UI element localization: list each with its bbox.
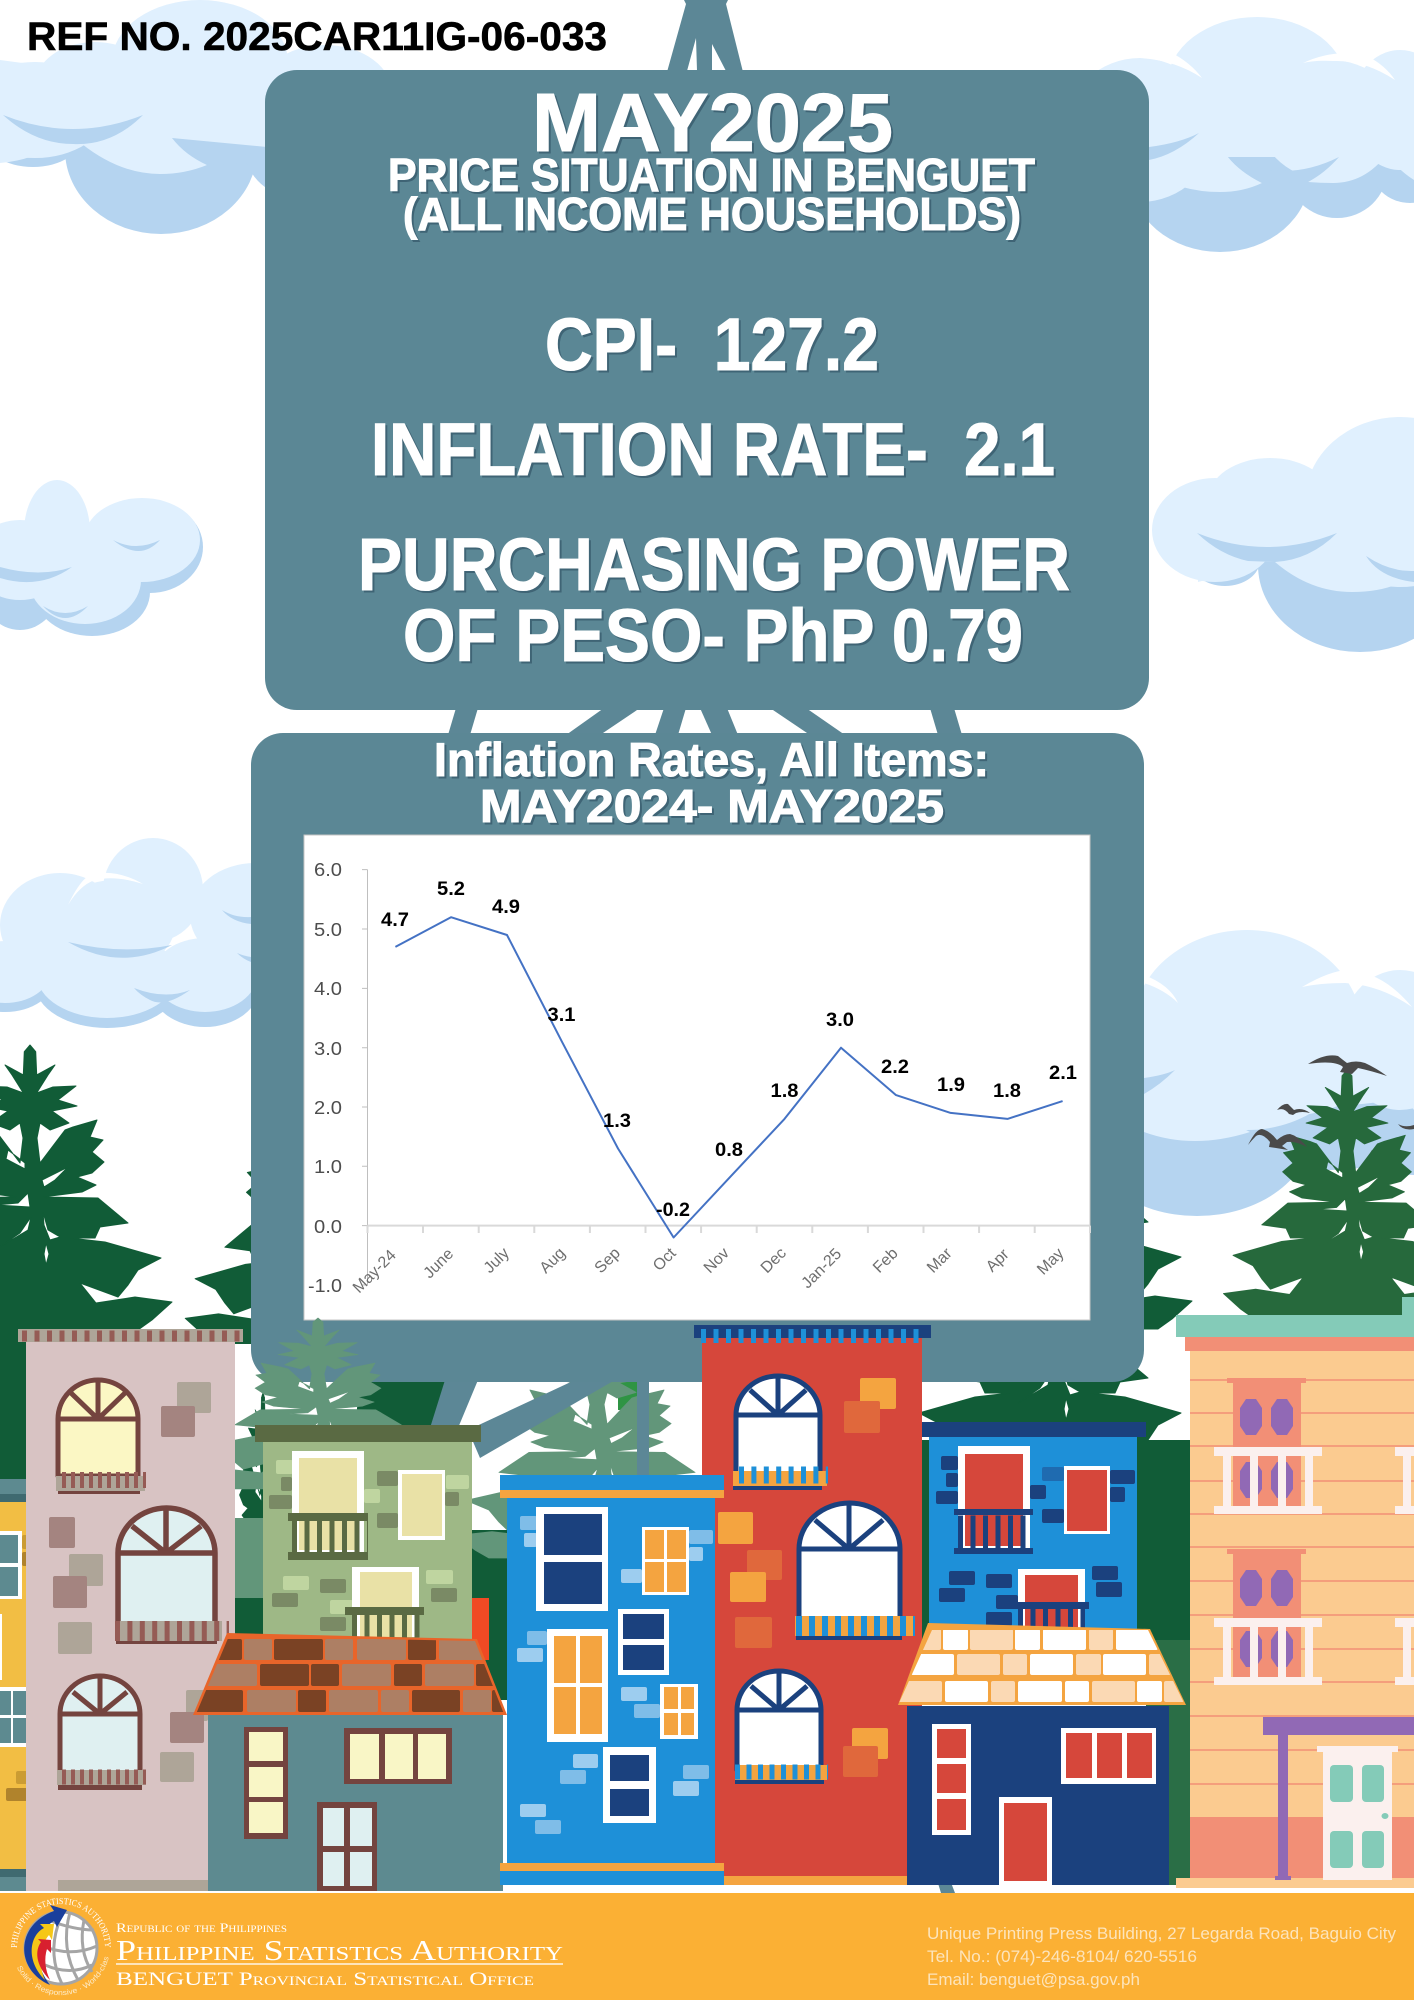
x axis labels: May [1034,1245,1068,1279]
window with balcony [954,1446,1033,1554]
y axis labels: 0.0 [314,1217,342,1237]
roof [898,1623,1186,1705]
y axis labels: 5.0 [314,920,342,940]
porch [1263,1717,1414,1880]
birds behind tree [1353,1114,1383,1165]
window: arched middle [795,1503,915,1640]
window tall [932,1724,971,1835]
data labels: 2.2 [881,1057,909,1078]
window: arched bottom [735,1671,828,1784]
window: arched top [733,1376,828,1490]
x axis labels: Apr [983,1246,1013,1276]
house: red [694,1325,931,1885]
house: navy [898,1623,1186,1885]
house: blue left [500,1475,724,1885]
panel: key figures [265,70,1149,710]
chart heading: MAY2024- MAY2025 [480,780,944,832]
window with balcony [288,1451,368,1560]
house: peach [1176,1297,1414,1888]
contact details: Unique Printing Press Building, 27 Legarda Road, Baguio City [927,1924,1396,1943]
reference number: REF NO. 2025CAR11IG-06-033 [27,15,607,59]
x axis labels: July [481,1245,513,1277]
window orange large [547,1629,608,1742]
line chart [304,835,1090,1320]
data labels: 1.3 [603,1111,631,1132]
balcony window upper [1214,1378,1322,1514]
x axis labels: Sep [592,1245,624,1277]
data labels: 3.0 [826,1010,854,1031]
y axis labels [308,860,342,1296]
y axis labels: 1.0 [314,1157,342,1177]
data labels: -0.2 [656,1200,690,1221]
footer band [0,1893,1414,2000]
panel: chart board [251,733,1144,1382]
x axis labels: Aug [537,1245,569,1277]
PSA logo [11,1898,111,1996]
roof [193,1633,507,1715]
house: red-orange accent [472,1598,489,1660]
x axis labels: Nov [701,1245,733,1277]
cloud: top left [0,0,393,234]
window right [1064,1466,1110,1534]
x axis [368,1226,1090,1233]
office name: Republic of the Philippines [116,1920,287,1935]
contact details: Email: benguet@psa.gov.ph [927,1970,1140,1989]
y axis labels: 4.0 [314,979,342,999]
subtitle line 2: (ALL INCOME HOUSEHOLDS) [403,188,1021,240]
window tall [244,1727,288,1839]
door [317,1802,377,1891]
contact details: Tel. No.: (074)-246-8104/ 620-5516 [927,1947,1197,1966]
window: arched bottom [60,1676,140,1775]
door [1317,1746,1398,1880]
window navy middle [618,1609,669,1675]
y axis labels: 6.0 [314,860,342,880]
house: green [255,1425,481,1642]
purchasing power line 2: OF PESO- PhP 0.79 [403,594,1023,677]
headings and key figures [358,76,1070,677]
x axis labels [350,1245,1068,1297]
window lower [1012,1569,1089,1631]
house: yellow [0,1479,58,1891]
window right [398,1470,445,1540]
data labels [381,879,1077,1221]
cloud: middle left [0,480,203,636]
contact details [927,1924,1396,1989]
x axis labels: Feb [870,1245,902,1277]
y axis labels: 3.0 [314,1039,342,1059]
data labels: 1.8 [770,1081,798,1102]
purchasing power line 1: PURCHASING POWER [358,523,1070,606]
window wide [344,1728,452,1784]
window navy bottom [603,1747,656,1823]
cloud: lower left [0,838,320,1028]
window lower [345,1567,424,1637]
CPI: CPI- 127.2 [545,303,879,386]
balcony edge right [1395,1447,1414,1685]
data labels: 2.1 [1049,1063,1077,1084]
office name: BENGUET Provincial Statistical Office [116,1969,534,1990]
inflation rate: INFLATION RATE- 2.1 [371,408,1055,491]
y axis labels: 2.0 [314,1098,342,1118]
office name: Philippine Statistics Authority [116,1935,563,1967]
title: month: MAY2025 [532,76,893,169]
x axis labels: Oct [650,1245,680,1275]
cloud: lower right [1082,930,1414,1216]
data line [395,917,1063,1238]
subtitle line 1: PRICE SITUATION IN BENGUET [388,149,1035,201]
data labels: 0.8 [715,1140,743,1161]
x axis labels: Dec [758,1245,790,1277]
x axis labels: June [421,1245,457,1282]
y axis labels: -1.0 [308,1276,342,1296]
chart heading [434,733,989,832]
house: teal [193,1633,507,1891]
data labels: 5.2 [437,879,465,900]
chart heading: Inflation Rates, All Items: [434,733,989,786]
house: blue right [922,1422,1146,1632]
x axis labels: Jan-25 [799,1245,845,1292]
data labels: 1.8 [993,1081,1021,1102]
data labels: 1.9 [937,1075,965,1096]
trees behind houses [0,1044,1414,1885]
x axis labels: May-24 [350,1247,400,1297]
data labels: 4.9 [492,897,520,918]
door [999,1797,1052,1885]
data labels: 4.7 [381,910,409,931]
window orange top [642,1527,689,1595]
pale tree in front of chart board [197,1318,439,1489]
window wide [1061,1728,1156,1784]
cloud: top right [1065,17,1414,252]
window: arched middle [118,1508,215,1625]
house: pink [18,1329,247,1891]
y axis [362,870,368,1285]
window: arched top [58,1380,138,1476]
balcony window lower [1214,1549,1322,1685]
office name [116,1920,563,1990]
PSA logo: PHILIPPINE STATISTICS AUTHORITY [11,1898,111,1948]
window orange small [660,1684,698,1739]
data labels: 3.1 [548,1005,576,1026]
window navy large [536,1507,608,1611]
birds [1248,1055,1414,1150]
x axis labels: Mar [924,1245,956,1277]
PSA logo: Solid · Responsive · World-class [18,1956,108,1996]
cloud: middle right [1152,417,1414,652]
easel legs [430,0,962,1893]
